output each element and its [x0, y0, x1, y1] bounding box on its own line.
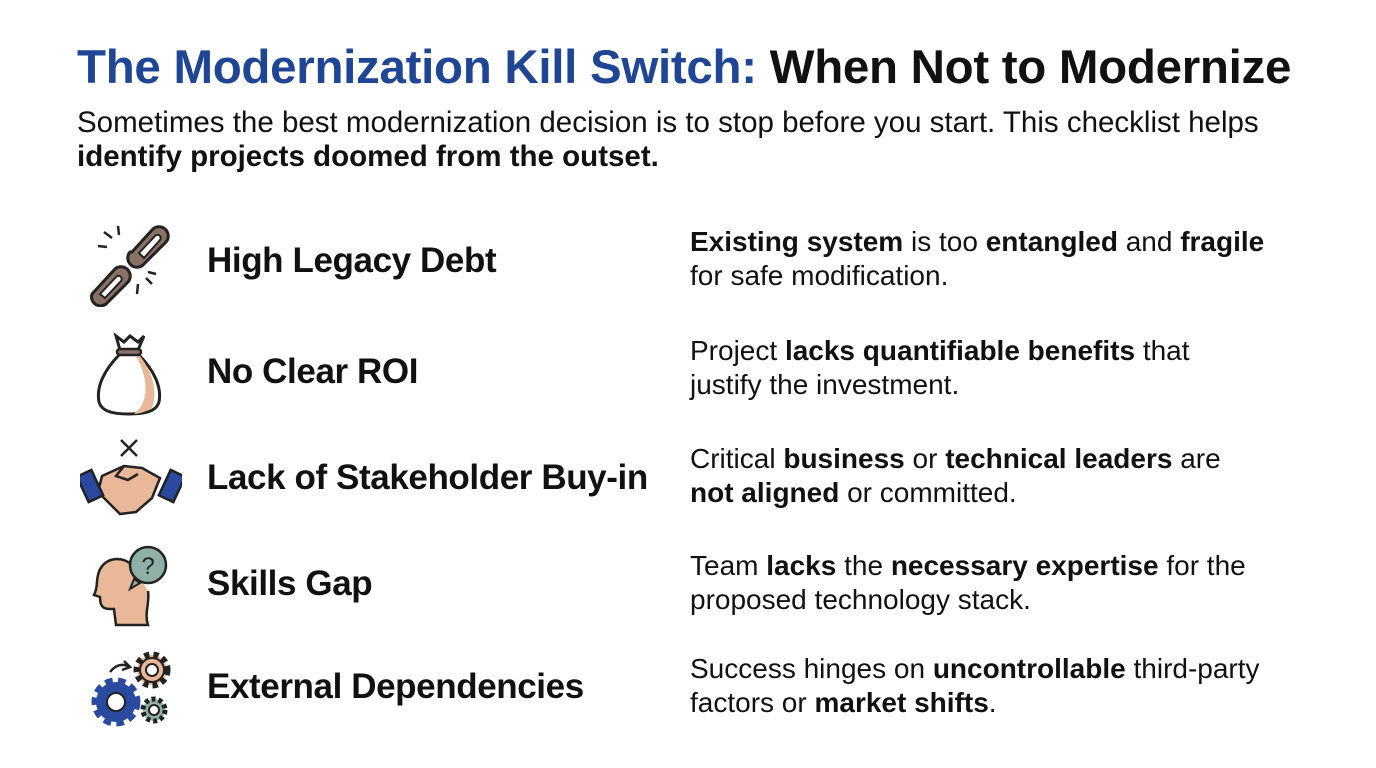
subtitle: identify projects doomed from the outset. [77, 140, 659, 173]
icon: money bag [96, 332, 162, 416]
icon: head with question [92, 546, 168, 626]
description: dependencies: Success hinges on uncontrollable third-party [690, 653, 1260, 684]
description: legacy debt: for safe modification. [690, 260, 948, 291]
icon: handshake with x [80, 439, 182, 516]
description: dependencies: factors or market shifts. [690, 687, 997, 718]
description: stakeholders: not aligned or committed. [690, 477, 1017, 508]
heading: no clear ROI: No Clear ROI [207, 352, 418, 391]
description: dependencies [690, 653, 1260, 718]
description: skills [690, 550, 1246, 615]
subtitle [77, 106, 1259, 173]
description: legacy debt [690, 226, 1264, 291]
description: stakeholders [690, 443, 1221, 508]
subtitle: Sometimes the best modernization decision is to stop before you start. This checklist helps [77, 106, 1259, 139]
description: stakeholders: Critical business or technical leaders are [690, 443, 1221, 474]
icon: head with question: ? [141, 553, 155, 580]
heading: high legacy debt: High Legacy Debt [207, 241, 496, 280]
icon: gears [92, 652, 170, 726]
heading: external dependencies: External Dependencies [207, 667, 584, 706]
description: ROI: justify the investment. [690, 369, 959, 400]
description: legacy debt: Existing system is too entangled and fragile [690, 226, 1264, 257]
heading: stakeholder buy-in: Lack of Stakeholder Buy-in [207, 458, 648, 497]
icon: broken chain [90, 225, 170, 307]
description: ROI: Project lacks quantifiable benefits that [690, 335, 1190, 366]
description: skills: Team lacks the necessary expertise for the [690, 550, 1246, 581]
heading: skills gap: Skills Gap [207, 564, 372, 603]
description: skills: proposed technology stack. [690, 584, 1031, 615]
description: ROI [689, 335, 1190, 400]
title: The Modernization Kill Switch: When Not to Modernize [77, 41, 1291, 94]
